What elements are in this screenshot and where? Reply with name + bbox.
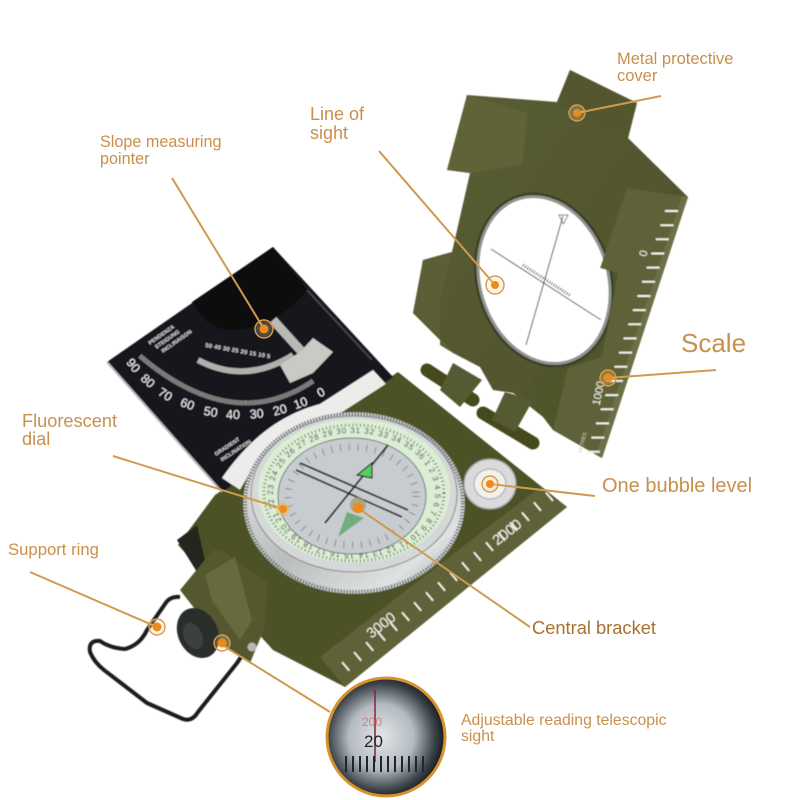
dial degree ticks xyxy=(288,447,416,545)
degree numbers: 20 xyxy=(271,402,289,419)
degree numbers: 30 xyxy=(249,406,264,422)
support wire xyxy=(90,597,257,720)
handle and wire xyxy=(90,550,267,720)
ring numbers: 15 16 17 18 19 20 21 22 23 24 25 26 27 28 29 30 31 32 33 34 35 36 1 2 3 4 5 6 7 8 9 10 11 12 13 14 xyxy=(266,426,442,559)
pendenza label: STEIGUNG xyxy=(154,329,181,351)
degree numbers xyxy=(123,356,328,422)
compass dial xyxy=(242,411,466,595)
sighting bars xyxy=(296,463,408,517)
metres text: METRES xyxy=(578,431,589,454)
plate right edge xyxy=(307,290,372,360)
base ticks xyxy=(345,487,561,667)
center hub xyxy=(350,497,366,513)
label: one bubble level: One bubble level xyxy=(602,475,752,497)
degree numbers: 0 xyxy=(314,385,328,400)
degree numbers: 50 xyxy=(203,404,219,420)
callout: scale xyxy=(600,370,716,386)
callout: line of sight xyxy=(379,151,504,294)
pendenza label: PENDENZA xyxy=(148,324,176,347)
label: scale: Scale xyxy=(681,328,746,358)
label: slope measuring pointer: pointer xyxy=(100,150,150,168)
callout: one bubble level xyxy=(482,476,595,496)
dark left corner xyxy=(177,525,205,572)
hinge one bracket xyxy=(440,363,482,407)
north needle xyxy=(325,445,388,537)
clinometer panel xyxy=(107,247,393,492)
magnifier circle xyxy=(327,678,445,796)
cover upper tab xyxy=(557,70,637,138)
bezel knurl xyxy=(245,414,463,592)
cover body xyxy=(413,70,688,458)
callout: central bracket xyxy=(353,503,530,627)
label: fluorescent dial: dial xyxy=(22,429,50,449)
base number 3000: 3000 xyxy=(364,610,399,642)
degree numbers: 10 xyxy=(292,394,310,412)
luminous ring xyxy=(258,419,450,563)
lens frame xyxy=(453,175,635,385)
knurled bezel xyxy=(243,412,465,594)
focus knob xyxy=(169,601,227,665)
cover shading xyxy=(447,95,527,173)
label: telescopic sight: Adjustable reading telescopic xyxy=(461,712,667,729)
callout: telescopic sight xyxy=(214,635,330,712)
hinge two xyxy=(483,413,533,443)
bubble glass xyxy=(474,469,506,499)
protective cover xyxy=(413,70,688,458)
scale strip xyxy=(553,188,688,458)
screw xyxy=(248,642,256,652)
base top xyxy=(178,372,567,687)
hinge one xyxy=(427,370,473,400)
degree numbers: 90 xyxy=(123,356,143,375)
hinges xyxy=(427,363,533,443)
ring ticks xyxy=(264,425,444,561)
label: fluorescent dial: Fluorescent xyxy=(22,411,117,431)
scale strip edge xyxy=(596,196,688,458)
label: line of sight: sight xyxy=(310,123,348,143)
base plate xyxy=(177,372,567,687)
gradient label: GRADIENT xyxy=(214,437,242,458)
hinge two bracket xyxy=(492,392,533,432)
reading 20: 20 xyxy=(364,732,383,751)
base scale face xyxy=(320,487,567,687)
pendenza label: INCLINAISON xyxy=(161,329,193,355)
callout: slope measuring pointer xyxy=(172,178,273,338)
label: metal protective cover: Metal protective xyxy=(617,50,733,68)
degree numbers: 60 xyxy=(178,395,196,413)
callout: fluorescent dial xyxy=(113,456,290,516)
cover left tab xyxy=(413,252,453,353)
silver band xyxy=(222,370,386,490)
label: support ring: Support ring xyxy=(8,540,99,559)
label: slope measuring pointer: Slope measuring xyxy=(100,133,221,151)
scale number 1000: 1000 xyxy=(591,380,607,407)
lens crosshair xyxy=(491,215,601,345)
plate edge xyxy=(107,362,222,492)
outer gradient scale xyxy=(140,356,313,403)
lens glass xyxy=(458,180,630,380)
handle highlight xyxy=(205,557,252,640)
label: line of sight: Line of xyxy=(310,104,365,124)
percent numbers: 50 40 30 25 20 15 10 5 xyxy=(205,343,271,361)
slope pointer xyxy=(273,320,333,383)
scale number 0: 0 xyxy=(638,249,650,258)
scale ticks xyxy=(587,211,678,452)
black plate xyxy=(107,247,393,492)
label: metal protective cover: cover xyxy=(617,67,658,85)
callout: support ring xyxy=(30,572,165,635)
reading ticks xyxy=(345,756,425,772)
telescopic sight magnifier xyxy=(327,678,445,796)
bubble level xyxy=(464,459,516,509)
inner dial xyxy=(278,438,426,554)
degree numbers: 70 xyxy=(156,385,175,404)
knob center xyxy=(179,620,207,652)
label: central bracket: Central bracket xyxy=(532,617,656,638)
callout: metal protective cover xyxy=(569,96,661,121)
degree numbers: 40 xyxy=(226,408,240,422)
bubble housing xyxy=(464,459,516,509)
reticle red line xyxy=(374,690,376,762)
bezel inner xyxy=(251,416,457,572)
degree numbers: 80 xyxy=(138,371,158,391)
label: telescopic sight: sight xyxy=(461,728,495,745)
red reading: 200 xyxy=(362,715,382,729)
gradient label: INCLINATION xyxy=(220,439,253,463)
inner percent scale xyxy=(198,355,293,371)
dark sector xyxy=(192,247,307,330)
handle body xyxy=(180,550,267,663)
base number 2000: 2000 xyxy=(490,517,525,549)
